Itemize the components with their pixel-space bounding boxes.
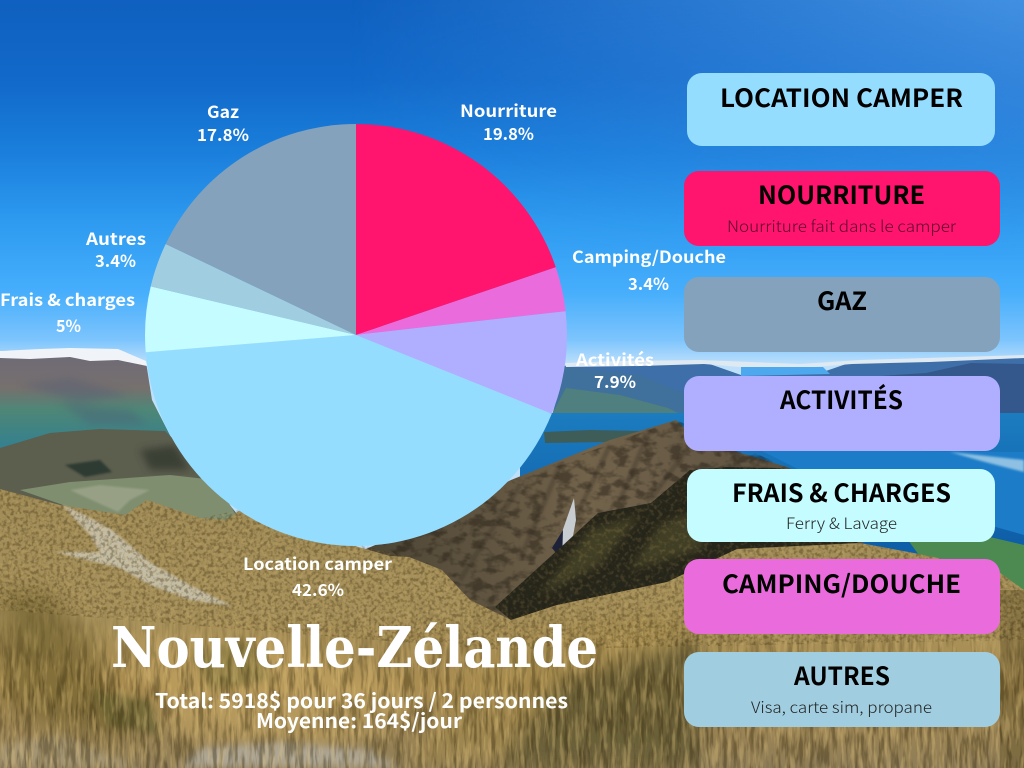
legend panel: Frais & charges: FRAIS & CHARGES [732, 474, 951, 510]
slice: Activités [356, 311, 567, 414]
legend panel: Gaz: GAZ [817, 282, 867, 318]
pie labels [0, 98, 726, 601]
legend panel: Activités: ACTIVITÉS [779, 381, 903, 417]
dark front ridge [495, 467, 860, 620]
pale scree streak [55, 505, 232, 606]
label: Gaz [197, 99, 249, 146]
legend panel: Autres: Visa, carte sim, propane [751, 696, 932, 718]
label: Activités: 7.9% [594, 369, 636, 393]
slice: Frais & charges [145, 286, 356, 352]
slice: Camping/Douche [356, 267, 566, 335]
label: Activités: Activités [575, 347, 654, 371]
legend panel: Camping/Douche [684, 559, 1000, 634]
legend panel: Nourriture: NOURRITURE [758, 176, 925, 212]
slice: Gaz [166, 124, 356, 335]
subtitle: totals [155, 685, 568, 734]
slice: Location camper [146, 335, 552, 546]
pie chart [145, 124, 567, 546]
label: Autres [85, 226, 146, 272]
legend panel: Location camper [687, 73, 995, 146]
foreground golden ridge [0, 489, 1024, 768]
mid hills and valley [0, 429, 250, 530]
label: Location camper [243, 551, 393, 601]
textures [0, 489, 1024, 650]
rock scree patch [561, 498, 576, 558]
label: Autres: 3.4% [95, 248, 136, 272]
legend panel: Autres: AUTRES [793, 657, 890, 693]
grass patches [0, 590, 130, 740]
legend panel: Frais & charges [687, 469, 995, 542]
slice: Nourriture [356, 124, 556, 335]
label: Gaz: Gaz [207, 99, 239, 123]
label: Nourriture: Nourriture [460, 98, 557, 122]
label: Camping/Douche: 3.4% [628, 271, 669, 295]
legend panel: Nourriture: Nourriture fait dans le camper [727, 215, 956, 237]
left mountain [0, 349, 175, 448]
label: Frais & charges [0, 287, 135, 337]
legend panel: Gaz [684, 277, 1000, 352]
lake [520, 413, 1024, 560]
legend panel: Camping/Douche: CAMPING/DOUCHE [722, 565, 961, 601]
label: Location camper: Location camper [243, 551, 393, 575]
label: Camping/Douche [572, 244, 726, 295]
label: Activités [575, 347, 654, 393]
label: Nourriture: 19.8% [483, 121, 534, 145]
label: Autres: Autres [85, 226, 146, 250]
legend panel: Nourriture [684, 171, 1000, 246]
subtitle: totals: Total: 5918$ pour 36 jours / 2 personnes [155, 685, 568, 714]
label: Nourriture [460, 98, 557, 145]
legend panel: Autres [684, 652, 1000, 727]
legend panel: Activités [684, 376, 1000, 451]
label: Frais & charges: Frais & charges [0, 287, 135, 311]
distant mountains right [555, 357, 1024, 460]
slice: Autres [151, 244, 356, 335]
label: Frais & charges: 5% [56, 313, 81, 337]
central mountain [340, 420, 870, 630]
label: Camping/Douche: Camping/Douche [572, 244, 726, 268]
title: Nouvelle-Zélande [111, 615, 598, 681]
label: Location camper: 42.6% [292, 577, 344, 601]
subtitle: totals: Moyenne: 164$/jour [256, 705, 462, 734]
label: Gaz: 17.8% [197, 122, 249, 146]
legend panel: Location camper: LOCATION CAMPER [720, 79, 963, 115]
legend panel: Frais & charges: Ferry & Lavage [786, 512, 897, 534]
green hill right [905, 530, 1024, 590]
